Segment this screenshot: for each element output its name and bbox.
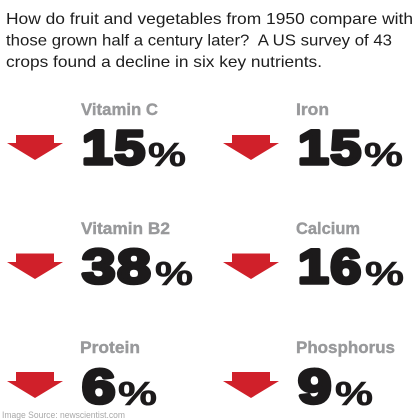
value: 15 percent [298,120,403,174]
panel: Vitamin B2 [7,219,193,294]
value: 6 percent [82,360,157,414]
panel: Calcium [223,219,404,293]
icon: down arrow [223,254,279,279]
value: 9 percent [298,360,373,414]
value: 15 percent: % [148,136,186,173]
value: 15 percent: 15 [298,120,363,174]
label: Vitamin B2: Vitamin B2 [81,219,170,238]
value: 38 percent: % [155,255,193,292]
icon: down arrow [7,372,63,398]
value: 16 percent [298,239,404,293]
value: 15 percent [82,120,186,174]
label: Iron: Iron [296,100,329,119]
icon: down arrow [7,254,63,279]
icon: down arrow [223,135,279,160]
value: 15 percent: % [364,136,403,173]
label: Vitamin C: Vitamin C [81,100,158,119]
icon: down arrow [7,135,63,160]
value: 16 percent: % [365,255,404,292]
value: 38 percent [82,240,193,294]
value: 6 percent: % [118,375,157,412]
panel: Phosphorus [223,338,395,414]
value: 9 percent: 9 [298,360,333,414]
intro text [6,11,413,71]
intro text: those grown half a century later? A US survey of 43 [6,32,392,50]
intro text: crops found a decline in six key nutrients. [6,54,322,71]
value: 15 percent: 15 [82,120,147,174]
panel: Protein [7,338,157,414]
label: Protein: Protein [80,338,140,357]
icon: down arrow [223,372,279,398]
label: Phosphorus: Phosphorus [296,338,395,357]
value: 16 percent: 16 [298,239,363,293]
value: 38 percent: 38 [82,240,152,294]
intro text: How do fruit and vegetables from 1950 compare with [6,11,413,28]
label: Calcium: Calcium [296,219,360,238]
value: 6 percent: 6 [82,360,117,414]
value: 9 percent: % [335,375,373,412]
panel: Vitamin C [7,100,186,174]
panel: Iron [223,100,403,174]
